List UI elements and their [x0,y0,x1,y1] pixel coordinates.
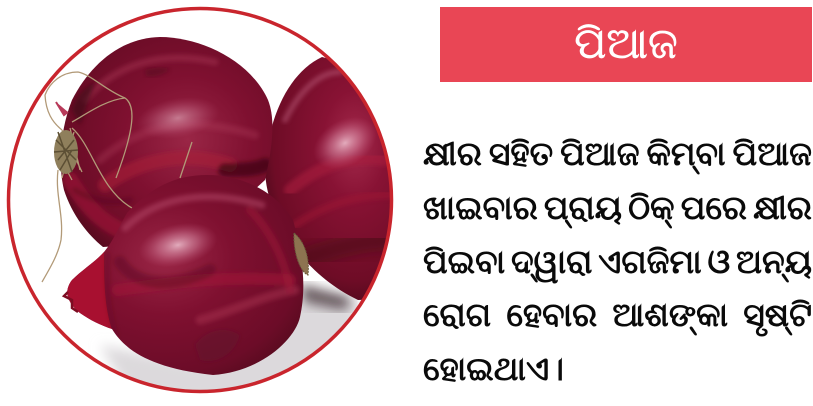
title banner [440,7,812,82]
onions group [42,37,390,390]
body text: କିମ୍ବା [646,135,726,172]
roots [42,72,192,282]
body text: ଦ୍ୱାରା [511,243,592,280]
body text: କ୍ଷୀର [423,135,482,172]
root knot [54,130,78,174]
body text: ପରେ [681,189,747,226]
onion right [266,57,390,300]
body text: ଖାଇବାର [423,189,538,226]
onion stem end [294,233,308,275]
onion photo in circle [6,6,394,394]
body text: ସୃଷ୍ଟି [743,296,812,333]
body text: ଏଗଜିମା [598,243,702,280]
body text: ପ୍ରାୟ [544,189,622,226]
body text: ହେବାର [506,296,597,333]
body text: ପିଇବା [423,243,505,280]
body text: ରୋଗ [423,296,491,333]
body text: ହୋଇଥାଏ। [423,350,564,387]
body text: ସହିତ [489,135,553,172]
body text: ଅନ୍ୟ [736,243,812,280]
body text: ଠିକ୍ [628,189,675,226]
body text [423,135,812,387]
body text: କ୍ଷୀର [753,189,812,226]
body text: ଓ [707,243,730,280]
body text: ଆଶଙ୍କା [612,296,728,333]
body text: ପିଆଜ [560,135,640,172]
title banner: ପିଆଜ [574,20,678,68]
onion back left [60,30,280,250]
onion front [60,170,310,380]
circle border [8,8,392,392]
body text: ପିଆଜ [733,135,812,172]
